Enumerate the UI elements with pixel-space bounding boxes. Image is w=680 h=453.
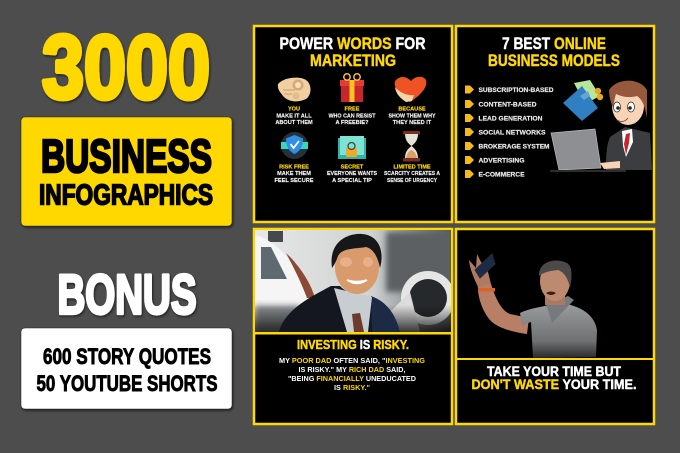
illustration: businessman at laptop [550, 81, 652, 172]
title: 7 best online: 7 BEST ONLINE [502, 35, 606, 53]
heading: 3000: 3000 [42, 18, 210, 118]
icon: shield badge [281, 132, 308, 159]
item: free: WHO CAN RESIST [328, 114, 376, 120]
list: business models: E-COMMERCE [478, 172, 525, 178]
list: business models: BROKERAGE SYSTEM [478, 144, 550, 150]
item: because: BECAUSE [398, 106, 426, 112]
panel: investing is risky [254, 229, 455, 424]
text: 50 youtube shorts: 50 YOUTUBE SHORTS [36, 371, 218, 396]
item: you [275, 106, 313, 126]
title: business models: BUSINESS MODELS [488, 52, 620, 70]
item: risk free: MAKE THEM [277, 171, 311, 177]
photo: speaker holding phone [469, 254, 597, 358]
photo: man by private jet [255, 230, 455, 332]
heading: bonus: BONUS [58, 262, 196, 326]
divider line [254, 332, 452, 334]
item: risk free [274, 164, 314, 184]
item: risk free: RISK FREE [279, 164, 309, 170]
text: business: BUSINESS [41, 130, 212, 182]
icon: gift box [340, 74, 364, 102]
item: free [328, 106, 376, 126]
item: secret: A SPECIAL TIP [332, 178, 372, 184]
title: power words: POWER WORDS FOR [280, 35, 426, 53]
item: because: THEY NEED IT [393, 120, 432, 126]
item: you: MAKE IT ALL [276, 114, 312, 120]
item: you: YOU [288, 106, 300, 112]
panel: business infographics badge [21, 117, 232, 226]
list: business models: LEAD GENERATION [478, 116, 543, 122]
panel: online business models [456, 26, 654, 222]
list: business models: CONTENT-BASED [478, 102, 537, 108]
item: you: ABOUT THEM [275, 120, 313, 126]
quote text: MY POOR DAD OFTEN SAID, "INVESTING [279, 356, 425, 365]
list: business models [465, 86, 554, 178]
item: limited time [384, 164, 440, 184]
heading: investing is risky: INVESTING IS RISKY. [297, 338, 409, 352]
quote: don't waste your time: DON'T WASTE YOUR TIME. [472, 377, 636, 392]
list: business models: SOCIAL NETWORKS [478, 130, 546, 136]
quote text: IS RISKY." [334, 383, 370, 392]
item: free: FREE [345, 106, 360, 112]
item: because [388, 106, 436, 126]
panel: take your time [456, 229, 654, 424]
quote text [279, 356, 425, 392]
item: because: SHOW THEM WHY [388, 114, 436, 120]
item: risk free: FEEL SECURE [274, 178, 314, 184]
item: limited time: LIMITED TIME [393, 164, 431, 170]
divider line [456, 358, 654, 360]
item: secret: EVERYONE WANTS [327, 171, 377, 177]
item: secret [327, 164, 377, 184]
quote text: IS RISKY." MY RICH DAD SAID, [298, 365, 406, 374]
item: secret: SECRET [341, 164, 364, 170]
icon: wallet with cash [563, 80, 603, 121]
panel: bonus list [21, 328, 232, 409]
list: business models: SUBSCRIPTION-BASED [478, 87, 554, 94]
quote: take your time: TAKE YOUR TIME BUT [487, 364, 622, 379]
icon: hugged heart [395, 77, 426, 102]
icon: hourglass [403, 131, 420, 162]
quote text: "BEING FINANCIALLY UNEDUCATED [288, 374, 416, 383]
panel: power words for marketing [254, 26, 452, 222]
text: infographics: INFOGRAPHICS [39, 180, 213, 212]
title: marketing: MARKETING [310, 52, 396, 70]
item: limited time: SENSE OF URGENCY [387, 178, 437, 184]
list: business models: ADVERTISING [478, 158, 524, 164]
item: limited time: SCARCITY CREATES A [384, 171, 440, 177]
icon: pointing hand [278, 78, 310, 101]
icon: locked folder [338, 136, 366, 159]
item: free: A FREEBIE? [335, 120, 369, 126]
text: 600 story quotes: 600 STORY QUOTES [43, 344, 211, 369]
